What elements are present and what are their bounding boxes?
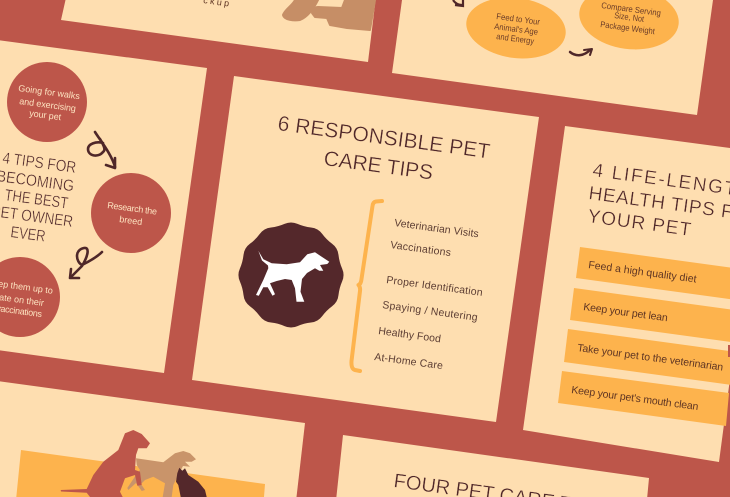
arrow: between bubbles — [570, 49, 592, 55]
marker: red fragment at edge — [728, 345, 730, 357]
list: care tips: At-Home Care — [374, 351, 444, 372]
bubble: feed to your animal's age and energy — [462, 0, 570, 64]
list: care tips — [374, 217, 483, 372]
list: care tips: Proper Identification — [386, 274, 483, 299]
bracket — [351, 201, 382, 371]
bubble: feed to your animal's age and energy: and Energy — [496, 31, 535, 46]
bar: take your pet to the veterinarian — [564, 329, 730, 385]
panel: bottom left card with pets — [0, 380, 305, 497]
panel: top right card — [392, 0, 713, 115]
bubble: research the breed — [91, 173, 171, 253]
panel: 4 life-length health tips — [523, 126, 730, 462]
bar: keep your pet's mouth clean — [558, 371, 729, 426]
heading — [586, 160, 730, 241]
list: care tips: Veterinarian Visits — [394, 217, 479, 240]
bar: keep your pet lean: Keep your pet lean — [583, 301, 669, 324]
bar: take your pet to the veterinarian: Take your pet to the veterinarian — [577, 342, 724, 374]
bubble: compare serving size — [575, 0, 683, 55]
bar: keep your pet's mouth clean: Keep your pet's mouth clean — [571, 384, 699, 413]
panel: four pet care tips — [335, 435, 649, 497]
banner: orange — [15, 450, 265, 497]
list: care tips: Vaccinations — [390, 239, 452, 259]
bubble: compare serving size: Size, Not — [614, 10, 645, 24]
bubble: keep them up to date — [0, 257, 60, 337]
list: care tips: Healthy Food — [378, 325, 442, 345]
bar: keep your pet lean — [570, 288, 730, 343]
panel: four tips for becoming the best pet owner — [0, 39, 207, 373]
bubble: going for walks — [7, 62, 87, 142]
panel: top left card — [61, 0, 378, 62]
bubble: compare serving size: Compare Serving — [601, 0, 662, 18]
bubble: research the breed: Research the — [107, 200, 158, 217]
bubble: going for walks: Going for walks — [18, 83, 81, 101]
bubble: going for walks: your pet — [29, 108, 62, 122]
bubble: research the breed: breed — [119, 214, 143, 227]
icon: dog badge — [238, 222, 344, 328]
bubble: compare serving size: Package Weight — [600, 19, 656, 36]
title: CARE TIPS — [322, 147, 434, 185]
arrow: curly down right — [88, 132, 115, 168]
bubble: going for walks: and exercising — [19, 96, 77, 114]
heading: YOUR PET — [586, 206, 693, 241]
heading: 4 tips for becoming the best pet owner ever: EVER — [9, 224, 46, 246]
bubble: feed to your animal's age and energy: Feed to Your — [496, 11, 541, 27]
list: care tips: Spaying / Neutering — [382, 299, 478, 324]
arrow: curly down left — [70, 248, 102, 278]
illustration: dogs and cat — [61, 430, 207, 497]
bar: feed a high quality diet: Feed a high quality diet — [588, 259, 697, 286]
arrow: top fragment — [453, 0, 463, 6]
heading: 4 tips for becoming the best pet owner ever — [0, 150, 77, 246]
illustration: dog legs — [283, 0, 375, 30]
heading: 4 tips for becoming the best pet owner ever: 4 TIPS FOR — [1, 150, 77, 177]
heading: 4 tips for becoming the best pet owner ever: THE BEST — [3, 187, 69, 213]
title: 6 RESPONSIBLE PET — [276, 112, 492, 164]
panel: central card 6 responsible pet care tips — [192, 76, 539, 422]
bar: feed a high quality diet — [576, 247, 730, 301]
bubble: feed to your animal's age and energy: Animal's Age — [494, 21, 539, 37]
